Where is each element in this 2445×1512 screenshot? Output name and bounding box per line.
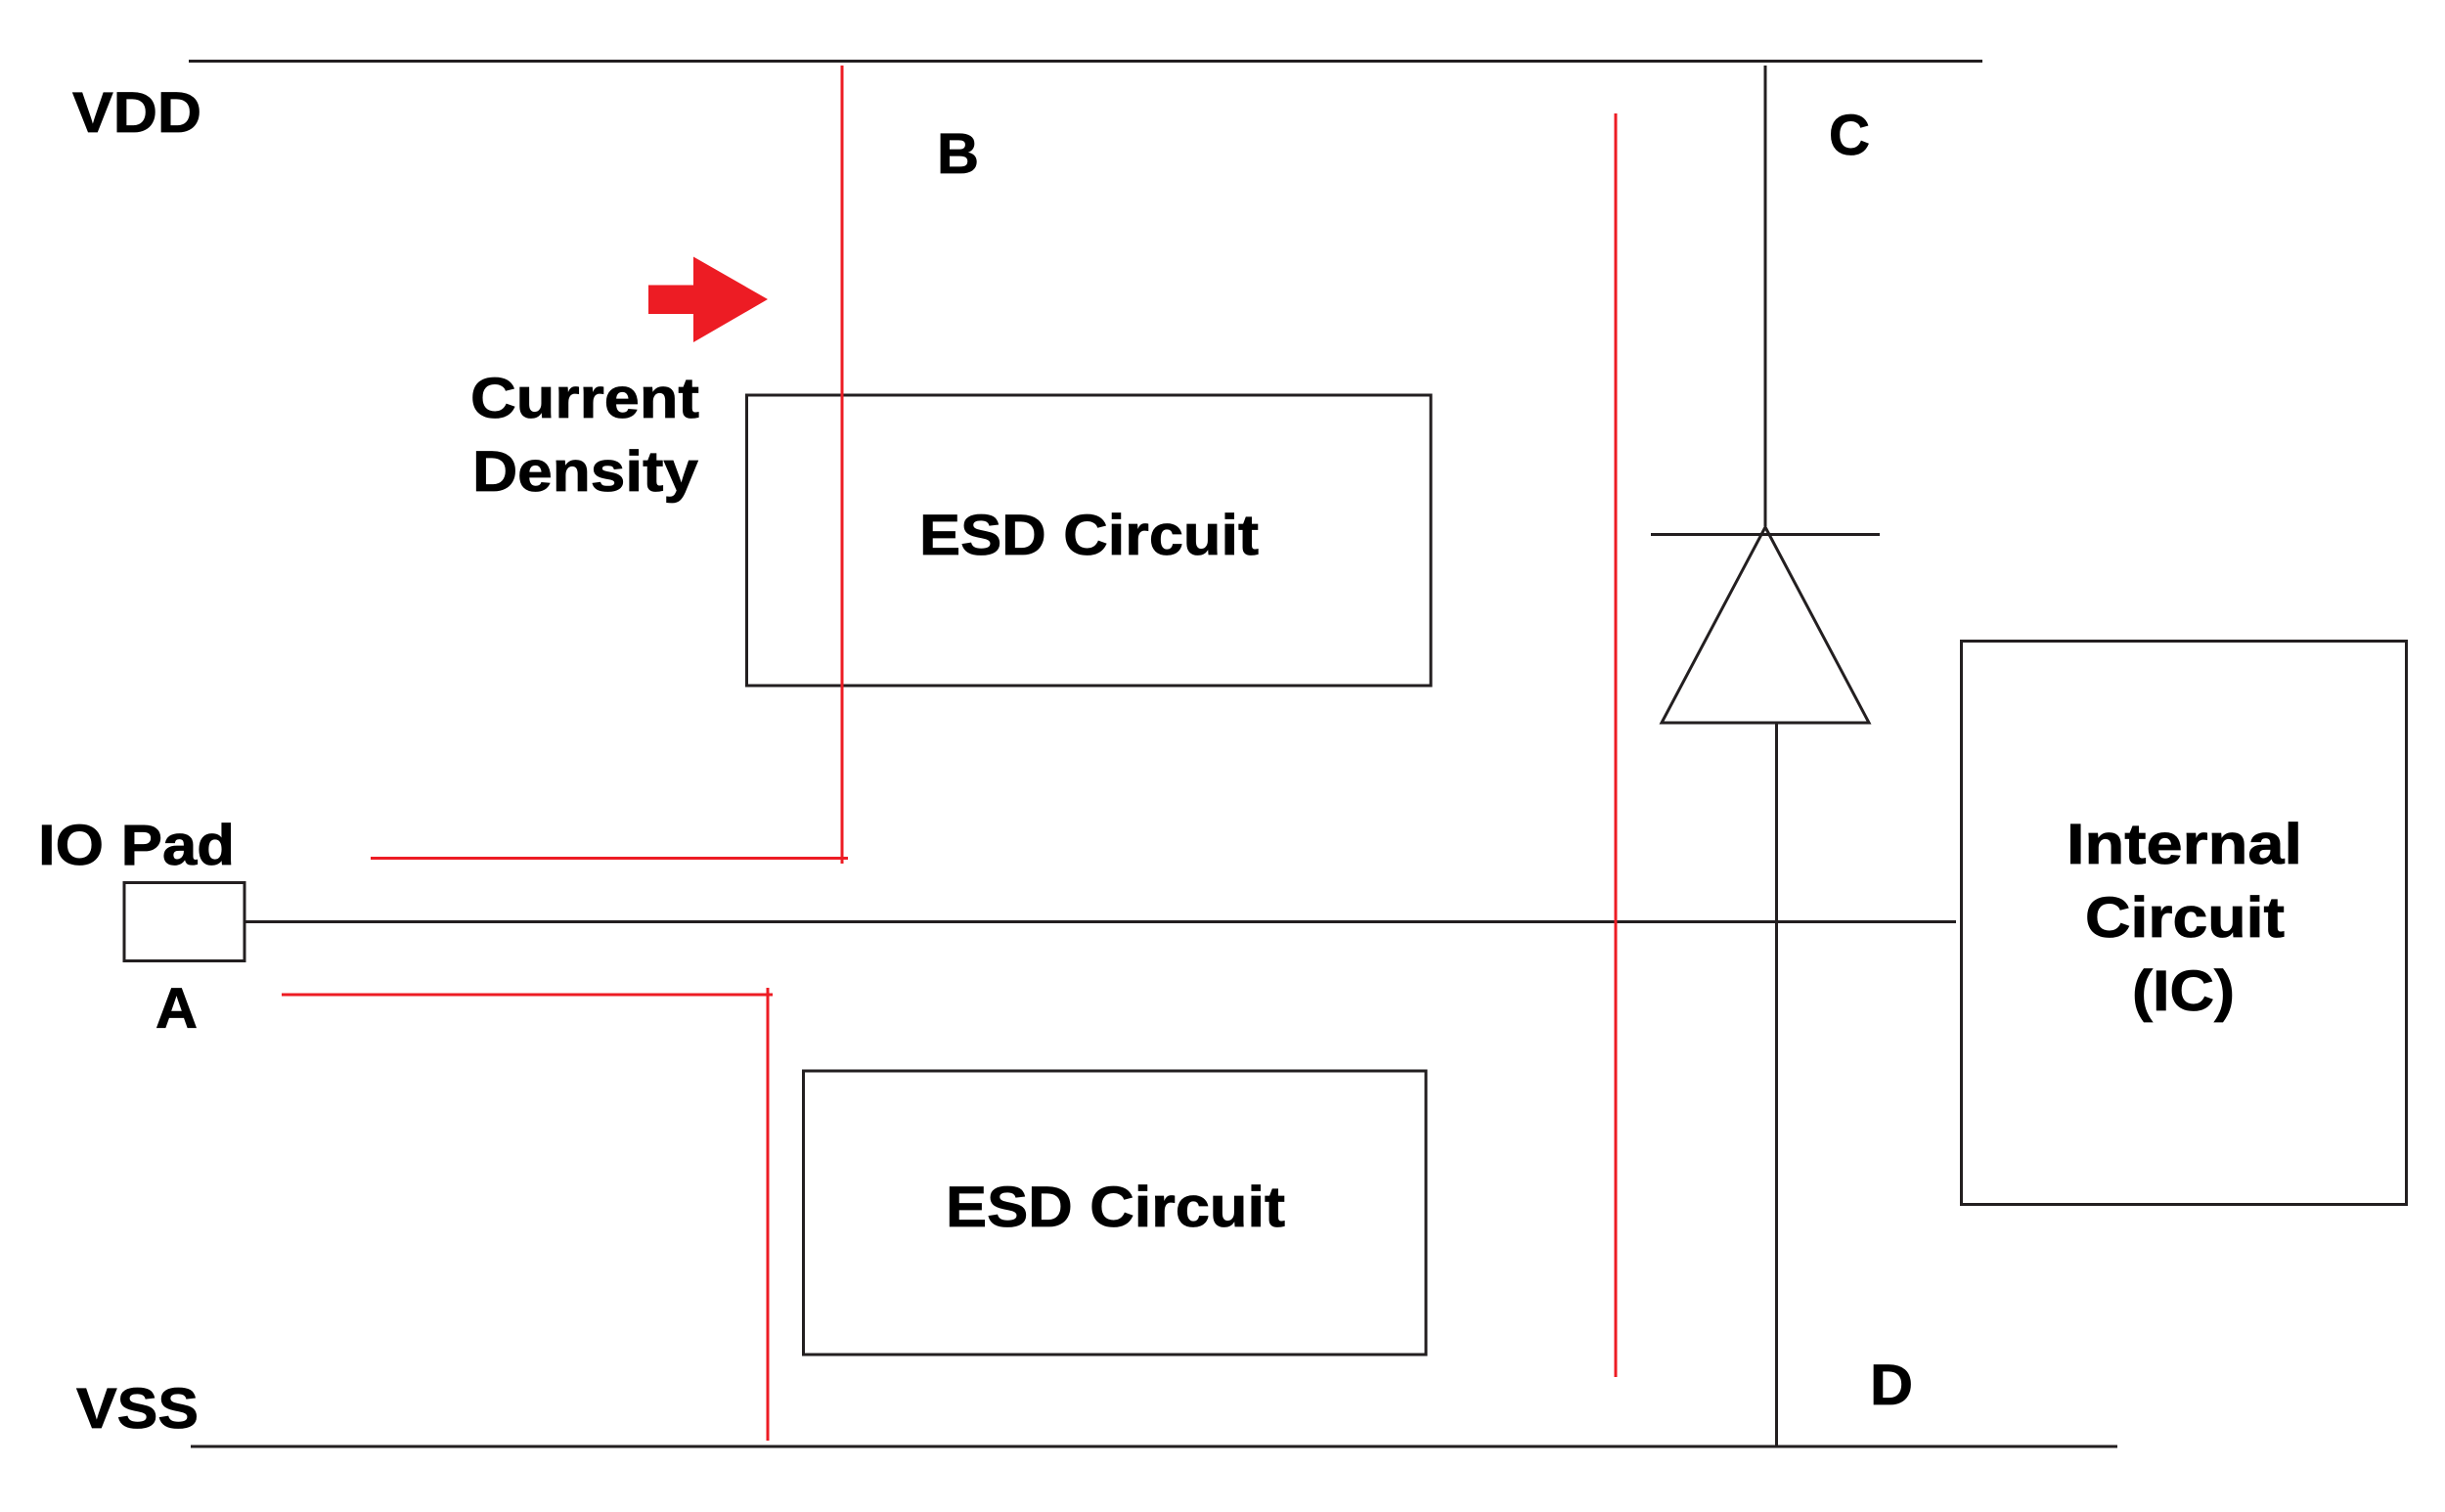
label D: D: [1870, 1354, 1913, 1417]
internal circuit label: Internal: [2067, 813, 2302, 876]
current path: A to VSS: [282, 988, 773, 1441]
IO Pad label: IO Pad: [38, 814, 235, 877]
IO pad box: [124, 882, 244, 960]
VDD rail: [189, 60, 1982, 63]
ESD circuit label top: ESD Circuit: [919, 504, 1259, 567]
internal circuit label: (IC): [2132, 959, 2235, 1023]
IO signal line: [244, 920, 1956, 923]
diode: [1651, 66, 1880, 1446]
ESD circuit box bottom: [804, 1071, 1426, 1355]
internal circuit box: [1962, 642, 2406, 1205]
VSS label: VSS: [76, 1377, 199, 1441]
Current Density label: [470, 367, 699, 504]
Current Density label: Current: [470, 367, 699, 430]
internal circuit label: [2067, 813, 2302, 1023]
Current Density label: Density: [472, 440, 698, 504]
arrow: current direction: [648, 256, 768, 342]
ESD circuit label bottom: ESD Circuit: [946, 1176, 1285, 1239]
ESD circuit box top: [747, 395, 1431, 686]
VDD label: VDD: [72, 81, 201, 145]
VSS rail: [191, 1445, 2117, 1447]
label A: A: [156, 977, 198, 1041]
label B: B: [937, 122, 979, 186]
internal circuit label: Circuit: [2085, 886, 2285, 950]
current path: A to B: [371, 66, 848, 864]
label C: C: [1829, 104, 1870, 167]
current path: centre vertical: [1614, 113, 1618, 1377]
